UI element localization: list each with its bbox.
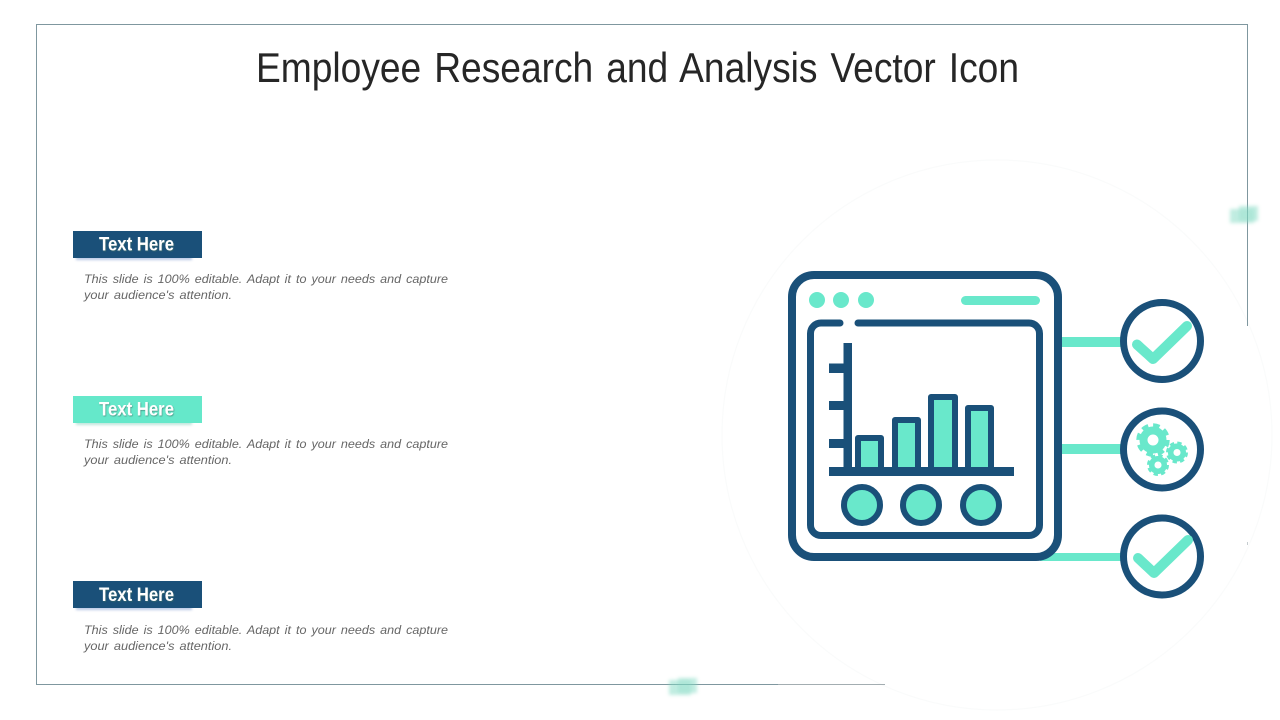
body text 1: your audience's attention. [83, 288, 232, 302]
label: text here navy [73, 231, 202, 260]
background circle [722, 160, 1272, 710]
label: text here teal: Text Here [99, 398, 174, 420]
icon: gears [1138, 426, 1186, 474]
item 3 [73, 581, 448, 653]
body text 3 [83, 623, 448, 653]
item 2 [73, 396, 448, 467]
window address bar [961, 296, 1040, 305]
label: text here navy: Text Here [99, 584, 174, 606]
body text 2: your audience's attention. [83, 453, 232, 467]
body text 3: your audience's attention. [83, 639, 232, 653]
title: Employee Research and Analysis Vector Icon [256, 44, 1019, 91]
body text 2: This slide is 100% editable. Adapt it to your needs and capture [84, 437, 448, 451]
inner screen outline [810, 323, 1040, 536]
window outline [792, 275, 1058, 557]
decorative smudge: right edge [1230, 206, 1258, 223]
icon: check mark [1137, 326, 1187, 359]
body text 1 [83, 272, 448, 302]
status circle: top check [1124, 302, 1200, 380]
label: text here navy: Text Here [99, 234, 174, 256]
bar chart [829, 343, 1014, 476]
label: text here navy [73, 581, 202, 610]
icon: check mark [1138, 540, 1188, 573]
body text 3: This slide is 100% editable. Adapt it to your needs and capture [84, 623, 448, 637]
chart axes [829, 343, 1014, 476]
status circle: gears [1124, 411, 1200, 488]
decorative smudge: bottom edge [669, 678, 697, 695]
connector lines [1040, 337, 1124, 561]
main icon: analytics window [792, 275, 1124, 561]
chart bars [858, 397, 991, 470]
window dots [809, 292, 874, 308]
three buttons [844, 487, 999, 523]
label: text here teal [73, 396, 202, 425]
body text 1: This slide is 100% editable. Adapt it to your needs and capture [84, 272, 448, 286]
status circle: bottom check [1124, 518, 1200, 595]
item 1 [73, 231, 448, 302]
body text 2 [83, 437, 448, 467]
